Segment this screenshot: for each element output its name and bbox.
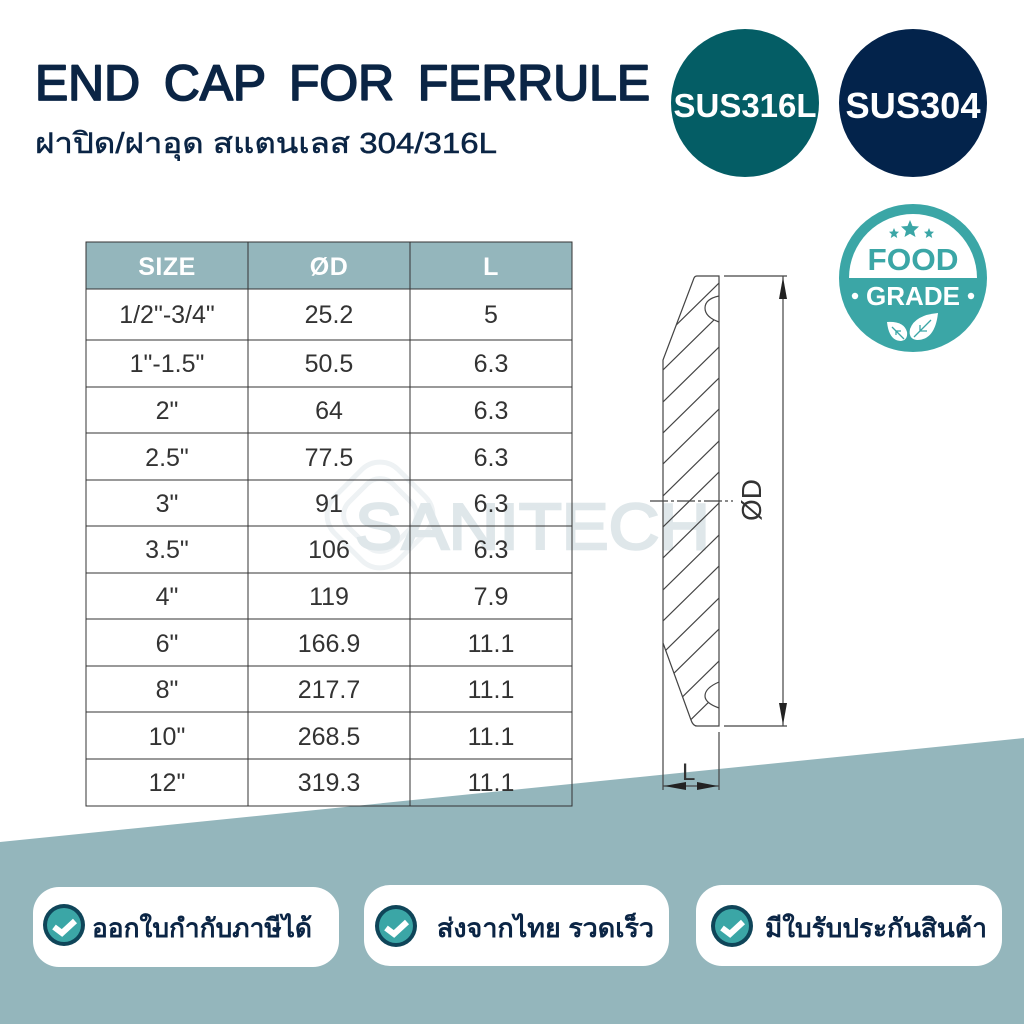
table rows: 6.3	[474, 350, 508, 378]
groove bottom	[705, 682, 719, 708]
pill: tax invoice	[33, 887, 339, 967]
watermark: Sanitech logo	[316, 451, 710, 579]
groove top	[705, 296, 719, 322]
table rows: 6.3	[474, 490, 508, 518]
table rows: 106	[308, 536, 350, 564]
icon: check	[375, 905, 417, 947]
badge: SUS304	[839, 29, 987, 177]
table header: L	[483, 253, 499, 281]
table rows: 11.1	[468, 723, 514, 751]
badge: food grade	[839, 204, 987, 352]
table rows: 10"	[149, 723, 185, 751]
table rows: 5	[484, 301, 498, 329]
table rows: 6.3	[474, 397, 508, 425]
watermark: Sanitech logo: SANITECH	[355, 490, 710, 563]
table rows: 166.9	[298, 630, 360, 658]
badge: food grade: GRADE	[866, 281, 960, 311]
pill: fast shipping	[364, 885, 669, 966]
icon: stars	[889, 220, 934, 238]
badge: SUS304: SUS304	[846, 85, 980, 126]
table rows: 8"	[156, 676, 178, 704]
table header: SIZE	[138, 253, 196, 281]
table rows: 1/2"-3/4"	[119, 301, 215, 329]
table rows: 91	[315, 490, 343, 518]
table rows: 77.5	[305, 444, 353, 472]
icon: leaves	[887, 313, 938, 341]
table rows: 11.1	[468, 769, 514, 797]
table rows	[119, 301, 514, 797]
subtitle: ฝาปิด/ฝาอุด สแตนเลส 304/316L	[35, 128, 497, 161]
table rows: 50.5	[305, 350, 353, 378]
table rows: 268.5	[298, 723, 360, 751]
badge: SUS316L	[671, 29, 819, 177]
table rows: 64	[315, 397, 343, 425]
table rows: 119	[309, 583, 349, 611]
L extension lines	[663, 643, 719, 790]
table rows: 1"-1.5"	[130, 350, 204, 378]
diagram: end cap cross-section	[650, 276, 787, 790]
table rows: 7.9	[474, 583, 508, 611]
table header	[86, 242, 572, 289]
table rows: 319.3	[298, 769, 360, 797]
hatching	[663, 283, 719, 747]
table rows: 12"	[149, 769, 185, 797]
table rows: 11.1	[468, 676, 514, 704]
background: teal diagonal band	[0, 738, 1024, 1024]
table rows: 6.3	[474, 536, 508, 564]
badge: food grade: FOOD	[868, 242, 958, 277]
table rows: 3.5"	[145, 536, 189, 564]
title: END CAP FOR FERRULE	[35, 55, 650, 111]
table: size chart	[86, 242, 572, 806]
ØD label: ØD	[736, 479, 767, 521]
badge: SUS316L: SUS316L	[674, 87, 816, 124]
table header: ØD	[310, 253, 348, 281]
table rows: 2.5"	[145, 444, 189, 472]
table rows: 25.2	[305, 301, 353, 329]
table rows: 11.1	[468, 630, 514, 658]
table rows: 2"	[156, 397, 178, 425]
table rows: 217.7	[298, 676, 360, 704]
table rows: 6"	[156, 630, 178, 658]
table rows: 4"	[156, 583, 178, 611]
centre line	[650, 500, 733, 502]
pill: warranty	[696, 885, 1002, 966]
pill: fast shipping: ส่งจากไทย รวดเร็ว	[437, 912, 654, 943]
table rows: 3"	[156, 490, 178, 518]
L arrow	[663, 782, 719, 790]
table rows: 6.3	[474, 444, 508, 472]
ØD extension lines	[724, 276, 787, 726]
ØD arrow	[779, 276, 787, 726]
pill: warranty: มีใบรับประกันสินค้า	[765, 913, 987, 943]
L label: L	[682, 759, 695, 786]
icon: check	[43, 904, 85, 946]
icon: check	[711, 905, 753, 947]
pill: tax invoice: ออกใบกำกับภาษีได้	[92, 912, 312, 943]
cap outline	[663, 276, 719, 726]
